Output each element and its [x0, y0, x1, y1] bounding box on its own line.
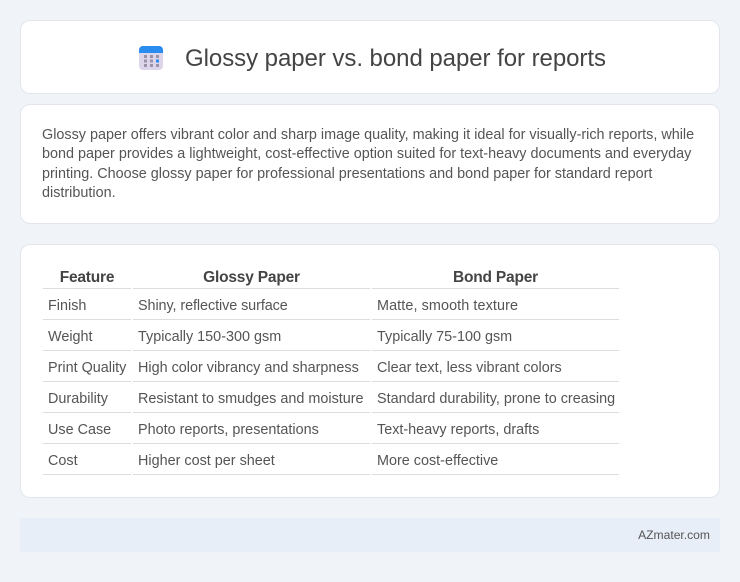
row: weight: Typically 75-100 gsm: [377, 329, 512, 345]
row: finish: Shiny, reflective surface: [138, 298, 288, 314]
panel: summary: [20, 104, 720, 224]
icon: calendar: [139, 46, 163, 70]
summary text: Glossy paper offers vibrant color and sharp image quality, making it ideal for visually-rich reports, while: [42, 127, 694, 143]
row: cost: Cost: [48, 453, 78, 469]
table header: Feature: [60, 269, 114, 286]
footer: [20, 518, 720, 552]
row: durability: Standard durability, prone to creasing: [377, 391, 615, 407]
row: print quality: Print Quality: [48, 360, 126, 376]
row: finish: Matte, smooth texture: [377, 298, 518, 314]
row: durability: Resistant to smudges and moisture: [138, 391, 364, 407]
title: Glossy paper vs. bond paper for reports: [185, 45, 606, 72]
row: finish: [43, 298, 619, 320]
table header: Glossy Paper: [203, 269, 300, 286]
row: weight: Weight: [48, 329, 93, 345]
footer credit: AZmater.com: [638, 528, 710, 542]
row: weight: Typically 150-300 gsm: [138, 329, 281, 345]
row: cost: Higher cost per sheet: [138, 453, 275, 469]
row: print quality: [43, 360, 619, 382]
summary text: bond paper provides a lightweight, cost-effective option suited for text-heavy documents and everyday: [42, 146, 691, 162]
row: cost: More cost-effective: [377, 453, 498, 469]
row: print quality: Clear text, less vibrant colors: [377, 360, 562, 376]
row: durability: Durability: [48, 391, 108, 407]
table header: [43, 269, 619, 289]
summary text: [42, 127, 694, 201]
row: use case: [43, 422, 619, 444]
row: use case: Photo reports, presentations: [138, 422, 319, 438]
row: durability: [43, 391, 619, 413]
row: print quality: High color vibrancy and sharpness: [138, 360, 359, 376]
panel: title card: [20, 20, 720, 94]
summary text: printing. Choose glossy paper for professional presentations and bond paper for standard report: [42, 166, 652, 182]
panel: comparison table: [20, 244, 720, 498]
row: cost: [43, 453, 619, 475]
row: use case: Use Case: [48, 422, 111, 438]
row: weight: [43, 329, 619, 351]
summary text: distribution.: [42, 185, 116, 201]
table header: Bond Paper: [453, 269, 538, 286]
row: use case: Text-heavy reports, drafts: [377, 422, 539, 438]
row: finish: Finish: [48, 298, 86, 314]
